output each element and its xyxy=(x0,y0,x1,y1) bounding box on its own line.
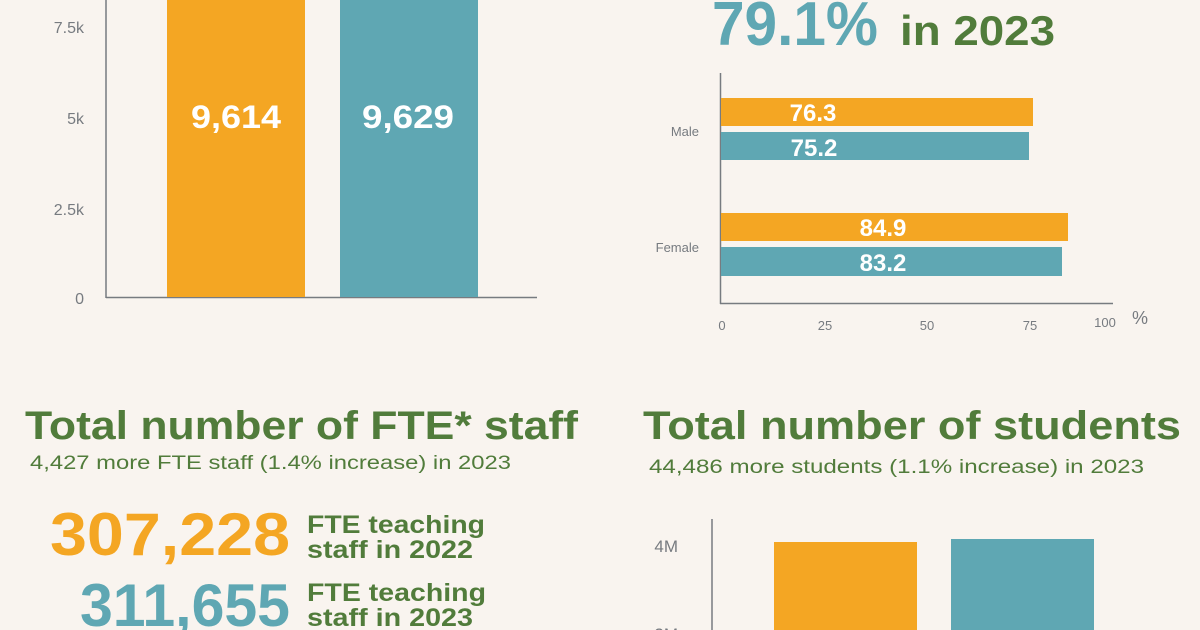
stat: 2022 staff: staff in 2022 xyxy=(307,536,473,564)
chart: students column chart xyxy=(654,519,1094,630)
subtitle: 4,427 more FTE staff (1.4% increase) in 2023 xyxy=(30,453,511,474)
stat: 2022 staff: 307,228 xyxy=(50,501,290,568)
bars xyxy=(721,98,1068,277)
bar: 2022: 9,614 xyxy=(191,99,281,135)
bar: 2022 xyxy=(167,0,305,297)
bar: 2023: 9,629 xyxy=(362,99,454,135)
y axis labels: 7.5k xyxy=(54,20,85,37)
y axis labels: 0 xyxy=(75,291,84,308)
panel: left column chart xyxy=(54,0,537,308)
heading: 79.1% in 2023 xyxy=(712,0,1055,59)
x axis labels: 50 xyxy=(920,318,934,333)
x axis labels: 100 xyxy=(1094,315,1116,330)
bar: 2023 xyxy=(340,0,478,297)
y axis labels: 5k xyxy=(67,111,85,128)
category labels: Female xyxy=(656,240,699,255)
stat: 2022 staff xyxy=(50,501,485,568)
category labels: Male xyxy=(671,124,699,139)
subtitle: 44,486 more students (1.1% increase) in 2023 xyxy=(649,457,1144,478)
heading: FTE staff: Total number of FTE* staff xyxy=(25,404,579,448)
bars: 75.2 xyxy=(791,135,837,162)
heading: FTE staff xyxy=(25,404,579,474)
stat: 2023 staff: FTE teaching xyxy=(307,579,486,607)
panel: horizontal bar chart by gender xyxy=(656,73,1148,333)
bars: 83.2 xyxy=(860,250,906,277)
x axis labels: % xyxy=(1132,308,1148,328)
bars: 76.3 xyxy=(790,100,836,127)
bars: 84.9 xyxy=(860,215,906,242)
x axis labels: 75 xyxy=(1023,318,1037,333)
x axis labels: 25 xyxy=(818,318,832,333)
chart: students column chart: 4M xyxy=(654,537,678,556)
stat: 2022 staff: FTE teaching xyxy=(307,511,485,539)
y axis labels: 2.5k xyxy=(54,202,85,219)
heading: students: Total number of students xyxy=(643,404,1181,448)
x axis labels xyxy=(718,308,1148,333)
category labels xyxy=(656,124,699,255)
x axis labels: 0 xyxy=(718,318,726,333)
stat: 2023 staff xyxy=(80,572,486,630)
y axis labels xyxy=(54,20,85,308)
heading: students xyxy=(643,404,1181,478)
heading: 79.1% in 2023: in 2023 xyxy=(900,7,1055,54)
